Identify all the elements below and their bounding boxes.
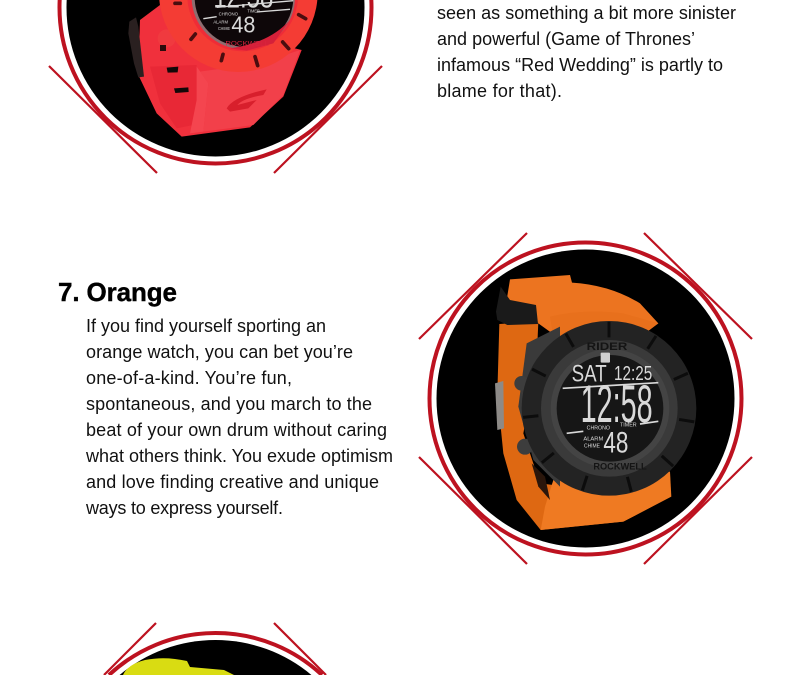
text block: red description: seen as something a bit more sinister [437,3,736,23]
text block: red description [437,3,736,101]
bezel notches [523,322,694,492]
crossing lines [49,66,382,173]
watch face readouts: CHRONO [587,425,611,431]
heading: 7. Orange: 7. Orange [58,277,177,307]
watch face readouts: ROCKWELL [225,40,269,47]
red ring [109,633,322,675]
icon: orange watch [495,275,696,530]
text block: red description: blame for that). [437,81,562,101]
watch face readouts: 12:58 [581,375,653,434]
black disc [120,640,311,675]
watch face readouts: CHRONO [219,11,238,16]
watch face readouts: TIMER [247,9,261,14]
red ring [430,242,742,554]
text block: orange description: spontaneous, and you march to the [86,394,372,414]
text block: orange description: and love finding creative and unique [86,472,379,492]
text block: red description: infamous “Red Wedding” is partly to [437,55,723,75]
icon: yellow watch [123,658,234,675]
panel: red watch image [49,0,382,173]
panel: orange watch image [419,233,752,564]
text block: orange description [85,316,393,518]
text block: orange description: ways to express yourself. [85,498,283,518]
black disc [436,250,734,548]
text block: red description: and powerful (Game of Thrones’ [437,29,695,49]
watch face readouts: ALARM [213,19,228,24]
text block: orange description: what others think. You exude optimism [85,446,393,466]
text block: orange description: beat of your own drum without caring [86,420,387,440]
watch face readouts [563,341,658,471]
crossing lines [419,233,752,564]
red ring [60,0,372,164]
watch face readouts: RIDER [587,341,628,353]
text block: orange description: orange watch, you can bet you’re [86,342,353,362]
watch face readouts: TIMER [620,423,637,429]
watch face readouts: SAT [572,360,607,387]
watch face readouts: CHIME [218,26,230,31]
crossing lines [104,623,326,675]
watch face readouts: 48 [603,427,628,460]
bezel notches [175,3,306,66]
text block: orange description: one-of-a-kind. You’re fun, [86,368,292,388]
black disc [66,0,364,156]
panel: yellow watch image [104,623,326,675]
watch face readouts: CHIME [584,443,600,449]
watch face readouts: ROCKWELL [593,461,647,471]
icon: red watch [128,0,318,137]
watch face readouts: 48 [231,11,255,37]
watch face readouts: 12:25 [614,362,652,385]
watch face readouts: ALARM [583,437,604,443]
watch face readouts [203,0,293,47]
text block: orange description: If you find yourself sporting an [86,316,326,336]
